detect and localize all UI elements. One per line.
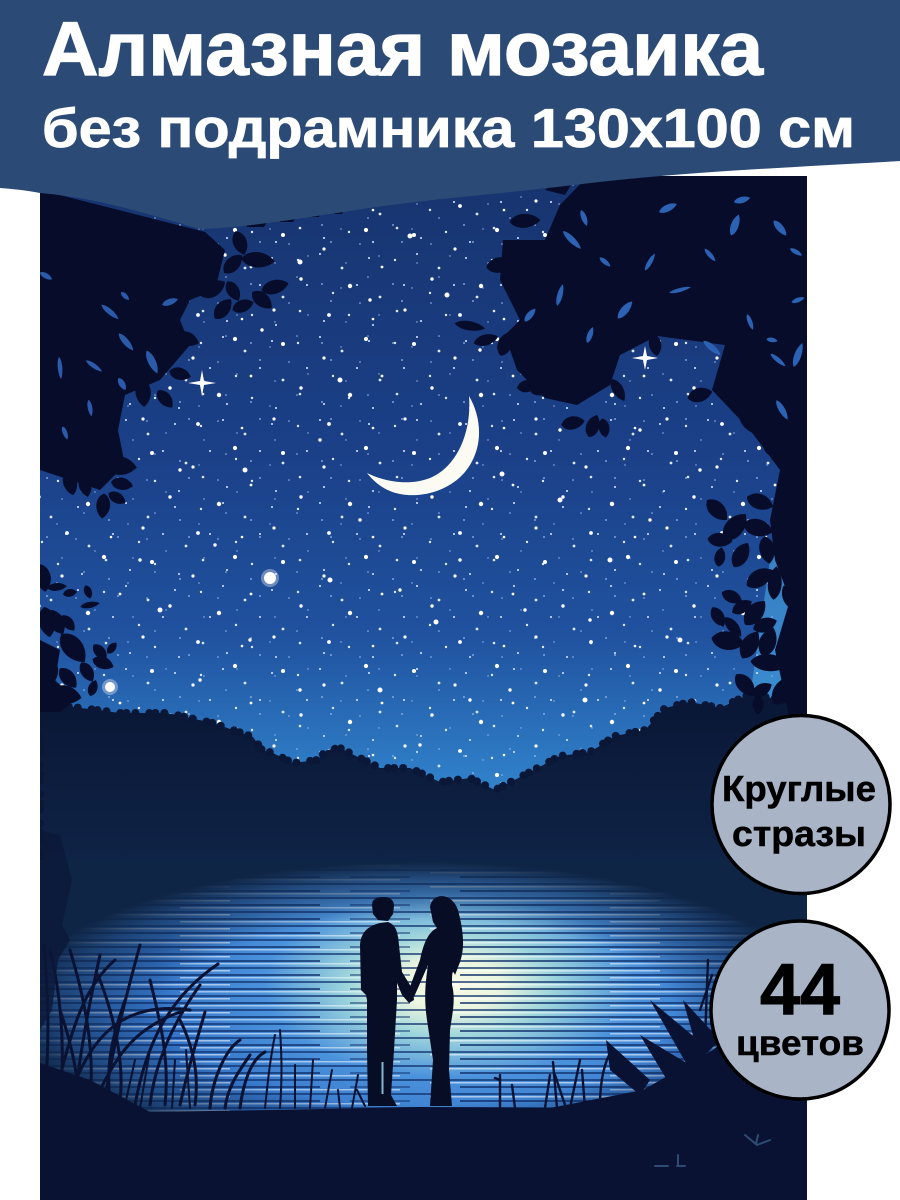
bright stars — [102, 346, 658, 695]
man — [360, 897, 414, 1106]
star field — [40, 176, 807, 796]
lake — [40, 860, 807, 1115]
lighter leaves in right canopy — [522, 195, 805, 421]
foreground marks — [655, 1135, 770, 1166]
grass right — [495, 960, 720, 1108]
foliage: left middle — [40, 564, 117, 712]
badge: 44 colours — [711, 921, 889, 1099]
banner shape — [0, 0, 900, 229]
banner — [0, 0, 900, 229]
badge: round rhinestones: Круглые — [722, 768, 876, 809]
woman — [408, 896, 463, 1106]
foliage: top right — [454, 176, 811, 720]
crescent moon — [367, 396, 479, 495]
badge: 44 colours: цветов — [736, 1024, 864, 1063]
badge: round rhinestones: стразы — [732, 813, 866, 854]
foliage: top left — [39, 190, 345, 519]
tree line and hills — [40, 693, 789, 860]
picture: night lake scene — [29, 176, 815, 1200]
badge: 44 colours: 44 — [760, 950, 840, 1030]
foliage: lower left bush — [40, 830, 72, 1030]
foliage: right middle — [706, 493, 790, 714]
night sky — [40, 176, 807, 816]
bright sky behind right foliage — [752, 556, 788, 698]
title line 1: Алмазная мозаика — [42, 7, 764, 92]
foreground shore — [40, 1046, 807, 1200]
badge: round rhinestones — [712, 716, 890, 894]
sky gaps in left canopy — [39, 270, 179, 440]
title line 2: без подрамника 130х100 см — [42, 97, 855, 159]
grass left — [44, 945, 265, 1108]
couple silhouette — [360, 896, 463, 1106]
gap between man's legs — [382, 1062, 384, 1094]
